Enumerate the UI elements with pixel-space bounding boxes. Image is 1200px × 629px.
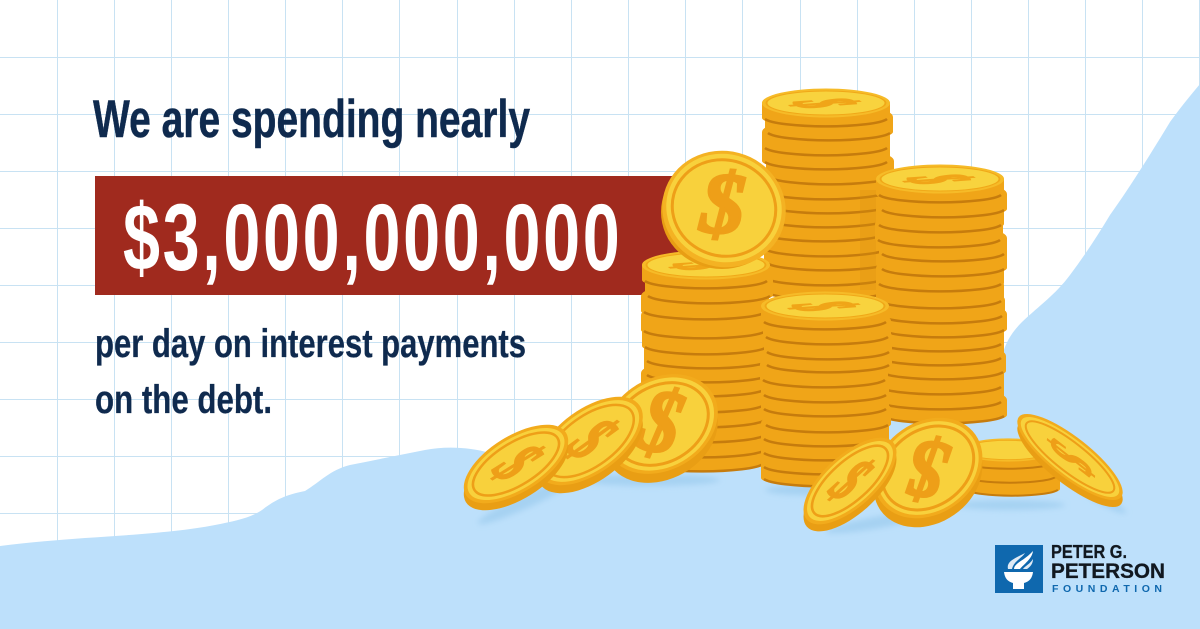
subtext: per day on interest payments xyxy=(95,322,526,366)
subtext xyxy=(95,322,526,422)
logo: Peter G. Peterson Foundation: PETERSON xyxy=(1051,560,1165,583)
coin stack: front center: $ xyxy=(775,297,874,314)
icon: tilted coin far left: $ xyxy=(478,431,558,493)
icon: thin tilted coin far right: $ xyxy=(1038,429,1106,487)
logo: Peter G. Peterson Foundation: FOUNDATION xyxy=(1052,583,1162,595)
icon: tilted coin right xyxy=(854,397,1002,548)
icon: tilted coin middle left: $ xyxy=(552,405,632,473)
coin stack: left xyxy=(638,250,773,472)
logo: Peter G. Peterson Foundation: PETER G. xyxy=(1051,542,1127,562)
icon: tilted coin far left xyxy=(451,409,581,526)
icon: large dollar coin: $ xyxy=(696,154,748,254)
icon: tilted coin right: $ xyxy=(901,420,955,518)
icon: tilted coin large left: $ xyxy=(629,368,693,476)
coin stack: front center xyxy=(760,292,892,487)
icon: torch mark xyxy=(995,545,1043,593)
subtext: on the debt. xyxy=(95,378,272,422)
coin stack: back center xyxy=(760,88,894,300)
coin stack: back right: $ xyxy=(890,170,989,187)
logo: Peter G. Peterson Foundation xyxy=(995,542,1165,595)
icon: tilted coin middle left xyxy=(522,379,658,511)
coin stack: small right xyxy=(960,438,1060,496)
icon: narrow tilted coin right xyxy=(790,423,910,546)
icon: thin tilted coin far right xyxy=(1006,401,1134,520)
icon: tilted coin large left xyxy=(586,354,736,503)
coin stack: back center: $ xyxy=(776,94,875,111)
coin stack: back right xyxy=(875,164,1007,424)
red banner with amount: $3,000,000,000 xyxy=(123,185,622,291)
icon: narrow tilted coin right: $ xyxy=(815,446,886,513)
coin shadows xyxy=(475,470,1128,537)
coin stack: left: $ xyxy=(656,256,755,273)
icon: large dollar coin xyxy=(649,137,799,281)
heading: We are spending nearly xyxy=(93,90,530,149)
